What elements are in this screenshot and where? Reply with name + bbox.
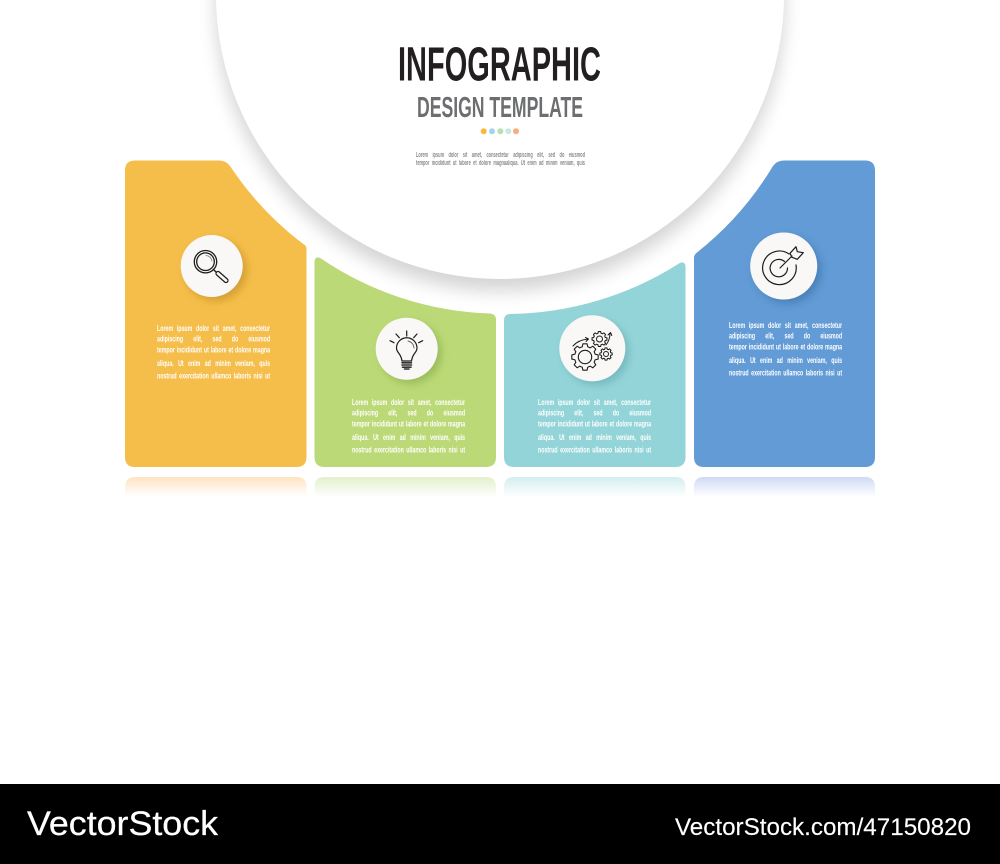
intro text (416, 152, 585, 166)
text block: teal card: aliqua. Ut enim ad minim veniam, quis (538, 432, 651, 442)
text block: green card: Lorem ipsum dolor sit amet, consectetur (352, 397, 465, 407)
text block: teal card: Lorem ipsum dolor sit amet, consectetur (538, 397, 651, 407)
footer brand: VectorStock (27, 805, 219, 843)
text block: yellow card: tempor incididunt ut labore et dolore magna (157, 344, 270, 354)
icon: magnifying glass (181, 235, 243, 297)
icon: target with dart (750, 232, 817, 300)
text block: blue card: Lorem ipsum dolor sit amet, consectetur (729, 320, 842, 330)
gear: right small (600, 348, 612, 360)
reflection: teal card (504, 477, 686, 497)
text block: green card (352, 397, 466, 454)
text block: yellow card: aliqua. Ut enim ad minim veniam, quis (157, 358, 270, 368)
colour dots under the heading (481, 128, 519, 134)
text block: blue card: adipiscing elit, sed do eiusmod (729, 331, 842, 341)
text block: yellow card (157, 323, 270, 380)
panel: green card (314, 257, 496, 467)
text block: green card: aliqua. Ut enim ad minim veniam, quis (352, 432, 465, 442)
text block: blue card: nostrud exercitation ullamco laboris nisi ut (729, 368, 842, 378)
text block: yellow card: adipiscing elit, sed do eiusmod (157, 334, 270, 344)
text block: teal card (538, 397, 652, 454)
gear: top small (592, 332, 607, 346)
text block: yellow card: Lorem ipsum dolor sit amet, consectetur (157, 323, 270, 333)
reflection: yellow card (125, 477, 306, 497)
icon: light bulb (376, 318, 438, 380)
text block: blue card (729, 320, 842, 378)
text block: teal card: adipiscing elit, sed do eiusmod (538, 408, 651, 418)
footer bar (0, 784, 1000, 864)
central white circle with drop shadow (216, 0, 784, 291)
text block: blue card: aliqua. Ut enim ad minim veniam, quis (729, 355, 842, 365)
panel: blue card (694, 160, 875, 467)
text block: teal card: nostrud exercitation ullamco laboris nisi ut (538, 444, 651, 454)
text block: yellow card: nostrud exercitation ullamco laboris nisi ut (157, 370, 270, 380)
panel: teal card (504, 262, 686, 467)
text block: green card: nostrud exercitation ullamco laboris nisi ut (352, 444, 465, 454)
text block: green card: adipiscing elit, sed do eiusmod (352, 408, 465, 418)
text block: blue card: tempor incididunt ut labore et dolore magna (729, 341, 842, 351)
subtitle: DESIGN TEMPLATE (417, 92, 583, 124)
title: INFOGRAPHIC (398, 38, 601, 92)
text block: green card: tempor incididunt ut labore et dolore magna (352, 418, 465, 428)
gear: large (572, 344, 598, 370)
icon: gears with arrows (559, 315, 625, 381)
text block: teal card: tempor incididunt ut labore et dolore magna (538, 418, 651, 428)
intro text: tempor incididunt ut labore et dolore magnaaliqua. Ut enim ad minim veniam, quis (416, 160, 585, 166)
reflection: blue card (694, 477, 875, 497)
panel: yellow card (125, 160, 306, 467)
reflection: green card (314, 477, 496, 497)
intro text: Lorem ipsum dolor sit amet, consectetur adipiscing elit, sed do eiusmod (416, 152, 585, 158)
footer url: VectorStock.com/47150820 (675, 814, 971, 841)
